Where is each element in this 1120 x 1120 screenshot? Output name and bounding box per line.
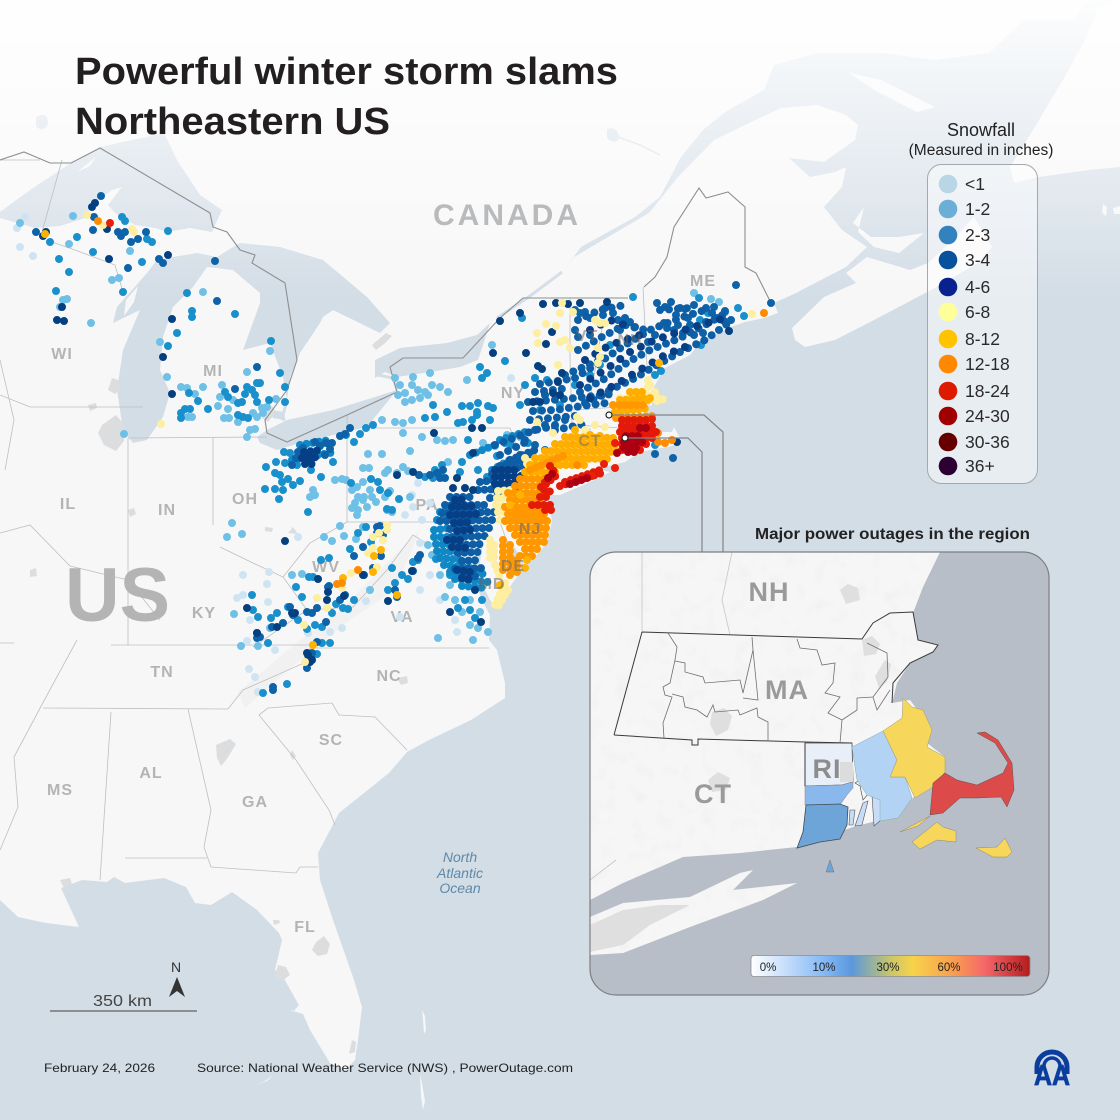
state labels: AL	[139, 765, 163, 782]
state labels over dots: VT	[576, 328, 598, 345]
state labels over dots: NJ	[519, 521, 541, 538]
great lakes	[0, 133, 490, 450]
inset percent scale: 0%	[760, 962, 776, 974]
snowfall legend: 6-8	[965, 302, 990, 322]
inset: Washington county, RI	[797, 804, 848, 848]
state labels: MI	[203, 363, 223, 380]
state labels: KY	[192, 605, 216, 622]
state labels: NC	[376, 668, 402, 685]
state labels: VA	[390, 609, 414, 626]
inset land	[590, 552, 945, 955]
state labels: OH	[232, 491, 258, 508]
title: Northeastern US	[75, 101, 390, 143]
snowfall legend: 4-6	[965, 277, 990, 297]
state labels over dots: CT	[578, 433, 602, 450]
inset map panel: RI	[812, 754, 842, 784]
ocean label: Ocean	[439, 880, 481, 896]
scale bar: 350 km	[93, 993, 152, 1010]
inset: county lines	[663, 633, 890, 743]
state labels: ME	[690, 273, 716, 290]
inset connector lines	[609, 415, 723, 552]
inset anchor point: north	[606, 412, 612, 418]
state borders	[0, 160, 650, 880]
state labels: PA	[415, 497, 439, 514]
snowfall legend: 8-12	[965, 329, 1000, 349]
inset map panel: MA	[765, 675, 809, 705]
snowfall legend heading: Snowfall	[947, 120, 1015, 140]
inset percent scale: 10%	[812, 962, 836, 974]
state labels over dots: NH	[617, 332, 643, 349]
inset heading: Major power outages in the region	[755, 526, 1030, 543]
inset: Plymouth county	[883, 698, 945, 798]
inset: Kent county, RI	[805, 782, 853, 805]
inset: Nantucket	[976, 838, 1012, 857]
inset: Elizabeth Islands	[900, 816, 930, 832]
inset state labels: NH	[748, 577, 790, 607]
snowfall legend: 3-4	[965, 250, 991, 270]
inset: Block Island	[826, 860, 834, 872]
country label: Canada: CANADA	[433, 199, 581, 232]
inset: Bristol county RI	[854, 781, 868, 800]
top fade overlay	[0, 0, 1120, 300]
title: Powerful winter storm slams	[75, 51, 618, 93]
snowfall legend: 24-30	[965, 406, 1010, 426]
snowfall legend: 18-24	[965, 381, 1010, 401]
snowfall legend: 36+	[965, 456, 995, 476]
inset: Barnstable county	[930, 732, 1014, 815]
snowfall legend heading: (Measured in inches)	[909, 142, 1053, 159]
state labels: MS	[47, 782, 73, 799]
snowfall legend: 30-36	[965, 432, 1010, 452]
inset: Newport county	[848, 797, 880, 826]
state labels: NY	[501, 385, 525, 402]
state labels: SC	[319, 732, 343, 749]
north arrow	[169, 959, 185, 997]
inset percent scale	[751, 956, 1030, 976]
snowfall legend: 2-3	[965, 225, 990, 245]
state labels: WV	[312, 559, 340, 576]
ocean label: Atlantic	[436, 865, 483, 881]
state labels: IN	[158, 502, 176, 519]
snowfall dots	[17, 196, 771, 693]
city and terrain patches	[30, 333, 408, 1054]
source: Source: National Weather Service (NWS) , PowerOutage.com	[197, 1061, 573, 1075]
state labels over dots: MD	[479, 576, 505, 593]
snowfall legend	[928, 164, 1038, 484]
inset anchor point: south	[622, 435, 628, 441]
inset map panel	[590, 552, 1049, 995]
ocean label: North	[443, 849, 477, 865]
land: Nova Scotia and islands	[255, 0, 1120, 1110]
logo: Anadolu Agency: AA	[1034, 1060, 1070, 1092]
inset percent scale: 100%	[993, 962, 1023, 974]
state labels: GA	[242, 794, 268, 811]
snowfall legend: 1-2	[965, 199, 990, 219]
inset percent scale: 30%	[876, 962, 900, 974]
inset percent scale: 60%	[937, 962, 961, 974]
state labels: TN	[150, 664, 174, 681]
inset: Massachusetts outline	[614, 612, 938, 786]
north arrow: N	[171, 959, 181, 975]
snowfall legend: 12-18	[965, 354, 1010, 374]
state labels: WI	[51, 346, 73, 363]
country label: US: US	[65, 553, 170, 638]
snowfall legend: <1	[965, 174, 985, 194]
inset map panel: CT	[694, 779, 732, 809]
inset: Providence county, RI	[805, 743, 853, 786]
state labels: FL	[294, 919, 316, 936]
inset: Martha's Vineyard	[912, 822, 956, 849]
inset: Bristol county MA	[852, 731, 912, 821]
state labels over dots	[479, 328, 643, 593]
canada border	[0, 148, 771, 442]
inset: NH border lines	[590, 552, 732, 880]
state labels over dots: DE	[501, 558, 525, 575]
state labels: IL	[60, 496, 76, 513]
date: February 24, 2026	[44, 1061, 155, 1075]
state labels	[47, 273, 716, 936]
